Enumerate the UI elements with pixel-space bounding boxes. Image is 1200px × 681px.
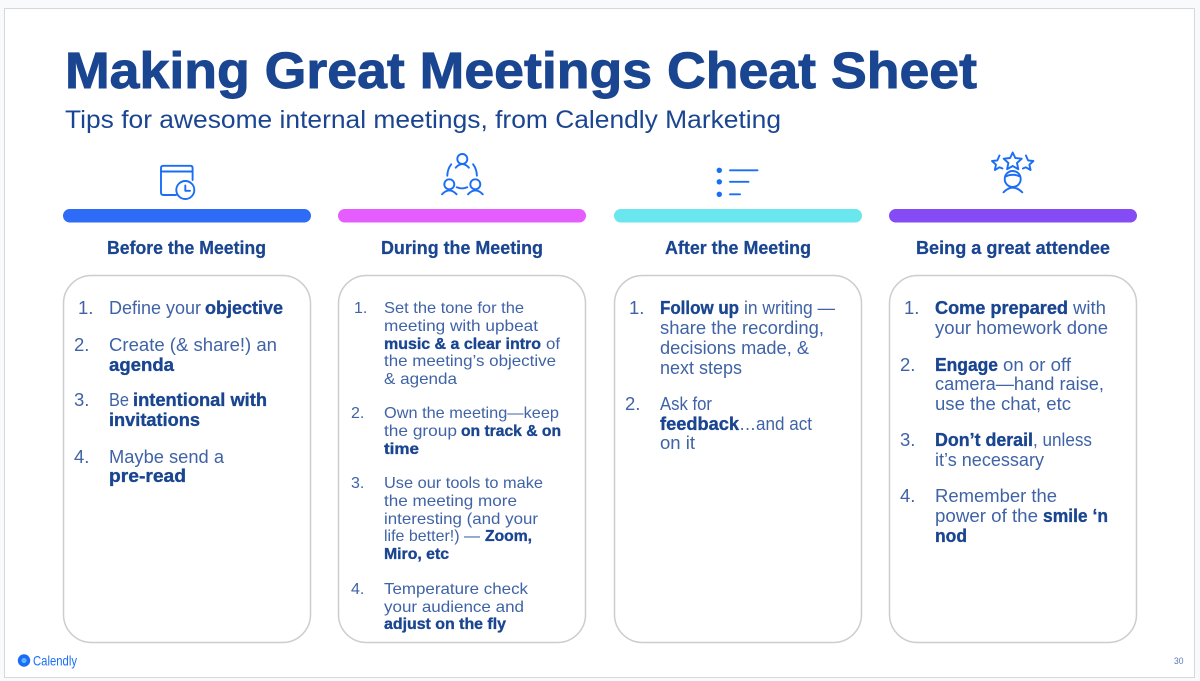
tip 1 [78,297,283,318]
bar: before [63,209,311,222]
tip 4: Temperature check [384,581,529,598]
tip 3: , unless [1033,429,1092,450]
tip 3 [74,389,267,430]
tip 4: your audience and [384,599,524,616]
tip 3: Zoom, [485,528,532,545]
tip 1: & agenda [384,371,457,388]
logo: Calendly: Calendly [33,652,77,668]
tip 4 [351,581,529,633]
heading: being a great attendee: Being a great attendee [916,237,1110,258]
tip 2: …and act [739,413,812,434]
tip 1: Come prepared [935,297,1068,318]
tip 2 [351,405,561,458]
icon: list [717,168,758,197]
tip 1: your homework done [935,317,1108,338]
tip 1: Set the tone for the [384,300,524,317]
tip 2 [900,354,1104,414]
tip 3: it’s necessary [935,449,1045,470]
tip 2: the group [384,423,457,440]
tip 3 [351,475,543,563]
tip 2: Own the meeting—keep [384,405,559,422]
tip 1: share the recording, [660,317,824,338]
tip 1: Follow up [660,297,739,318]
tip 4: Remember the [935,485,1057,506]
tip 4: power of the [935,505,1038,526]
panel: after the meeting [614,276,862,642]
heading: after the meeting: After the Meeting [665,237,811,258]
tip 2: camera—hand raise, [935,373,1104,394]
tip 4: 4. [351,581,364,598]
tip 2: agenda [109,354,175,375]
heading: during the meeting: During the Meeting [381,237,543,258]
tip 3: 3. [74,389,89,410]
bar: after [614,209,862,222]
title: Making Great Meetings Cheat Sheet [65,42,977,99]
tip 4 [900,485,1108,546]
bar: attendee [889,209,1137,222]
tip 4: nod [935,525,967,546]
tip 3: Miro, etc [384,546,449,563]
tip 1: meeting with upbeat [384,318,539,335]
tip 1: 1. [78,297,93,318]
tip 2: 2. [351,405,364,422]
tip 1: with [1072,297,1106,318]
tip 4: smile ‘n [1043,505,1108,526]
tip 1: 1. [354,300,367,317]
tip 4: pre-read [109,465,186,486]
subtitle: Tips for awesome internal meetings, from Calendly Marketing [65,106,781,134]
tip 1 [629,297,835,378]
icon: person with three stars [992,152,1033,192]
tip 1: next steps [660,357,742,378]
tip 3: Use our tools to make [384,475,543,492]
icon: group of people [442,154,483,194]
page number: 30 [1174,656,1184,666]
tip 1: Define your [109,297,201,318]
tip 2: 2. [900,354,915,375]
tip 2: 2. [625,393,640,414]
tip 1: music & a clear intro [384,336,541,353]
tip 3: intentional with [133,389,267,410]
logo: Calendly [18,652,77,668]
tip 2: 2. [74,334,89,355]
tip 3: Be [109,389,129,410]
tip 3: the meeting more [384,493,517,510]
tip 1: of [546,336,561,353]
tip 3: life better!) — [384,528,480,545]
tip 1: 1. [629,297,644,318]
tip 3: 3. [351,475,364,492]
tip 1 [354,300,561,388]
tip 2: use the chat, etc [935,393,1071,414]
tip 3: interesting (and your [384,511,539,528]
tip 4: adjust on the fly [384,616,506,633]
tip 3: Don’t derail [935,429,1033,450]
icon: calendar with clock [161,166,194,199]
heading: before the meeting: Before the Meeting [107,237,266,258]
tip 2 [625,393,812,453]
tip 2: feedback [660,413,740,434]
tip 1: 1. [904,297,919,318]
tip 1: decisions made, & [660,337,810,358]
bar: during [338,209,586,222]
tip 4: 4. [74,446,89,467]
tip 3: 3. [900,429,915,450]
tip 1: the meeting’s objective [384,353,556,370]
tip 2: on or off [1003,354,1072,375]
tip 2: Engage [935,354,998,375]
panel: during the meeting [338,276,586,642]
tip 3 [900,429,1092,470]
tip 2 [74,334,277,375]
tip 2: on it [660,432,695,453]
tip 4: Maybe send a [109,446,225,467]
tip 1: objective [205,297,283,318]
tip 3: invitations [109,409,200,430]
panel: before the meeting [64,276,310,642]
tip 4: 4. [900,485,915,506]
tip 4 [74,446,225,486]
tip 2: Create (& share!) an [109,334,277,355]
tip 2: time [384,441,419,458]
tip 2: on track & on [461,423,561,440]
tip 1: in writing — [744,297,835,318]
tip 2: Ask for [660,393,712,414]
panel: being a great attendee [890,276,1136,642]
tip 1 [904,297,1108,338]
